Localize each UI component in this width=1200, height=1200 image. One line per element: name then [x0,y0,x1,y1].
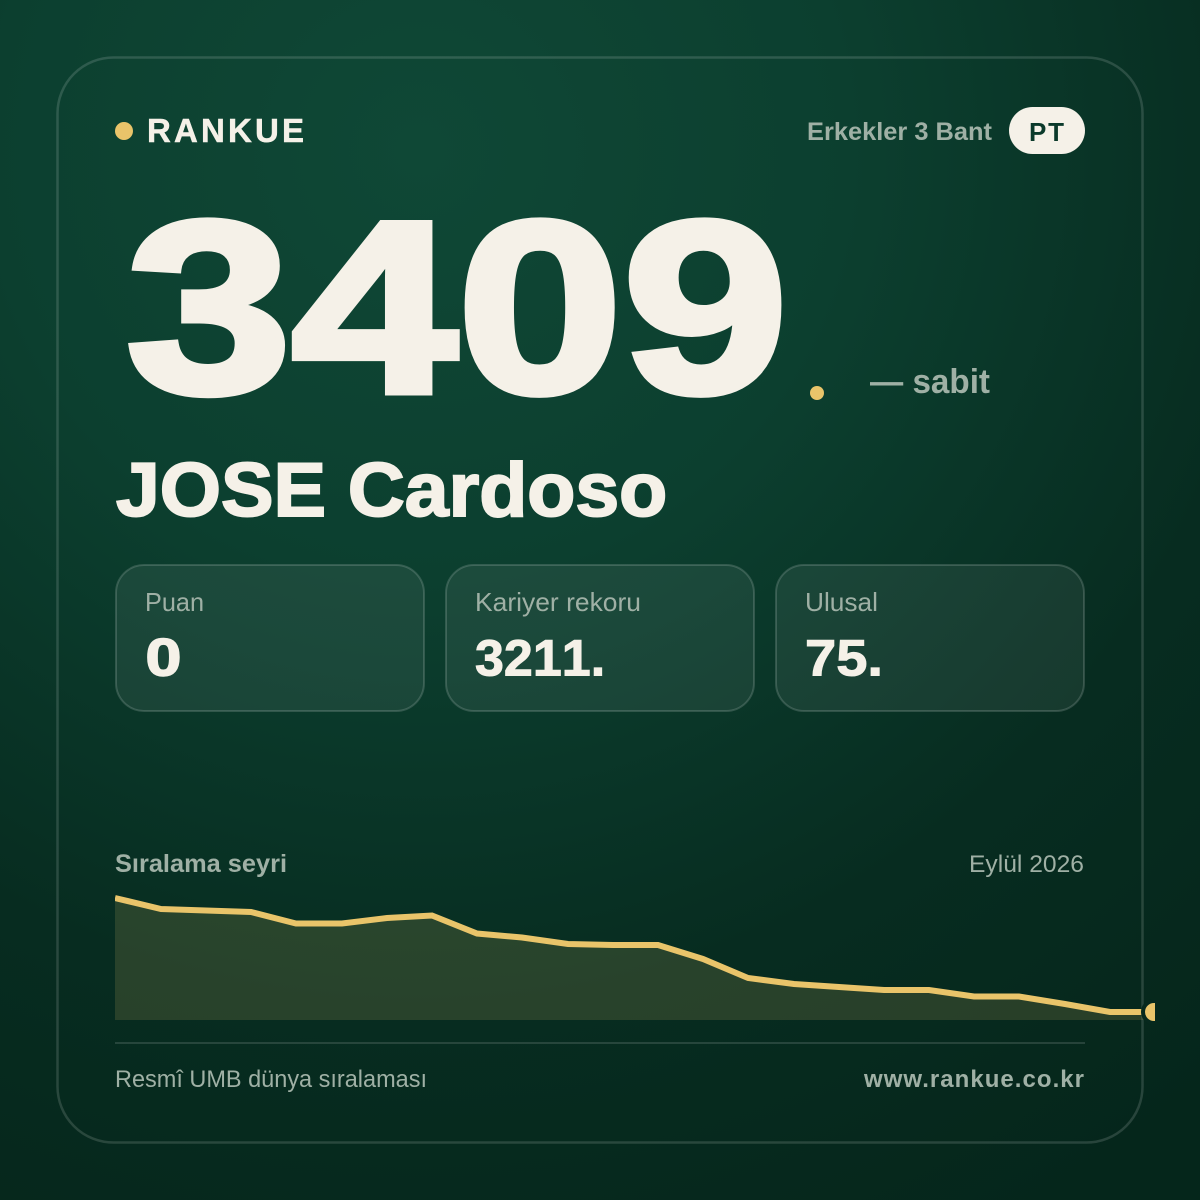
line chart: ranking history [115,898,1165,1023]
panel: points: Puan [145,587,204,617]
panel: career record: Kariyer rekoru [475,587,641,617]
rank number: 3409 [126,170,788,444]
chart end marker [1141,1003,1155,1021]
icon: brand dot [115,122,133,140]
chart line [115,898,1155,1012]
panel: points: 0 [146,627,181,687]
chart date: Eylül 2026 [969,851,1084,878]
country badge [1009,107,1085,154]
panel: national rank [776,565,1084,711]
chart heading: Sıralama seyri [115,850,287,878]
brand name: RANKUE [147,112,304,149]
player name: JOSE Cardoso [116,448,667,533]
website: www.rankue.co.kr [863,1066,1084,1093]
country badge: PT [1029,117,1064,147]
panel: career record [446,565,754,711]
category label: Erkekler 3 Bant [807,118,993,146]
panel: career record: 3211. [475,629,605,686]
rank change: — sabit [870,363,990,401]
brand logo [115,112,304,149]
panel: national rank: Ulusal [805,587,878,617]
icon: rank dot [810,386,824,400]
source note: Resmî UMB dünya sıralaması [115,1066,427,1093]
panel: national rank: 75. [805,630,883,687]
panel: points [116,565,424,711]
chart area [115,898,1155,1020]
